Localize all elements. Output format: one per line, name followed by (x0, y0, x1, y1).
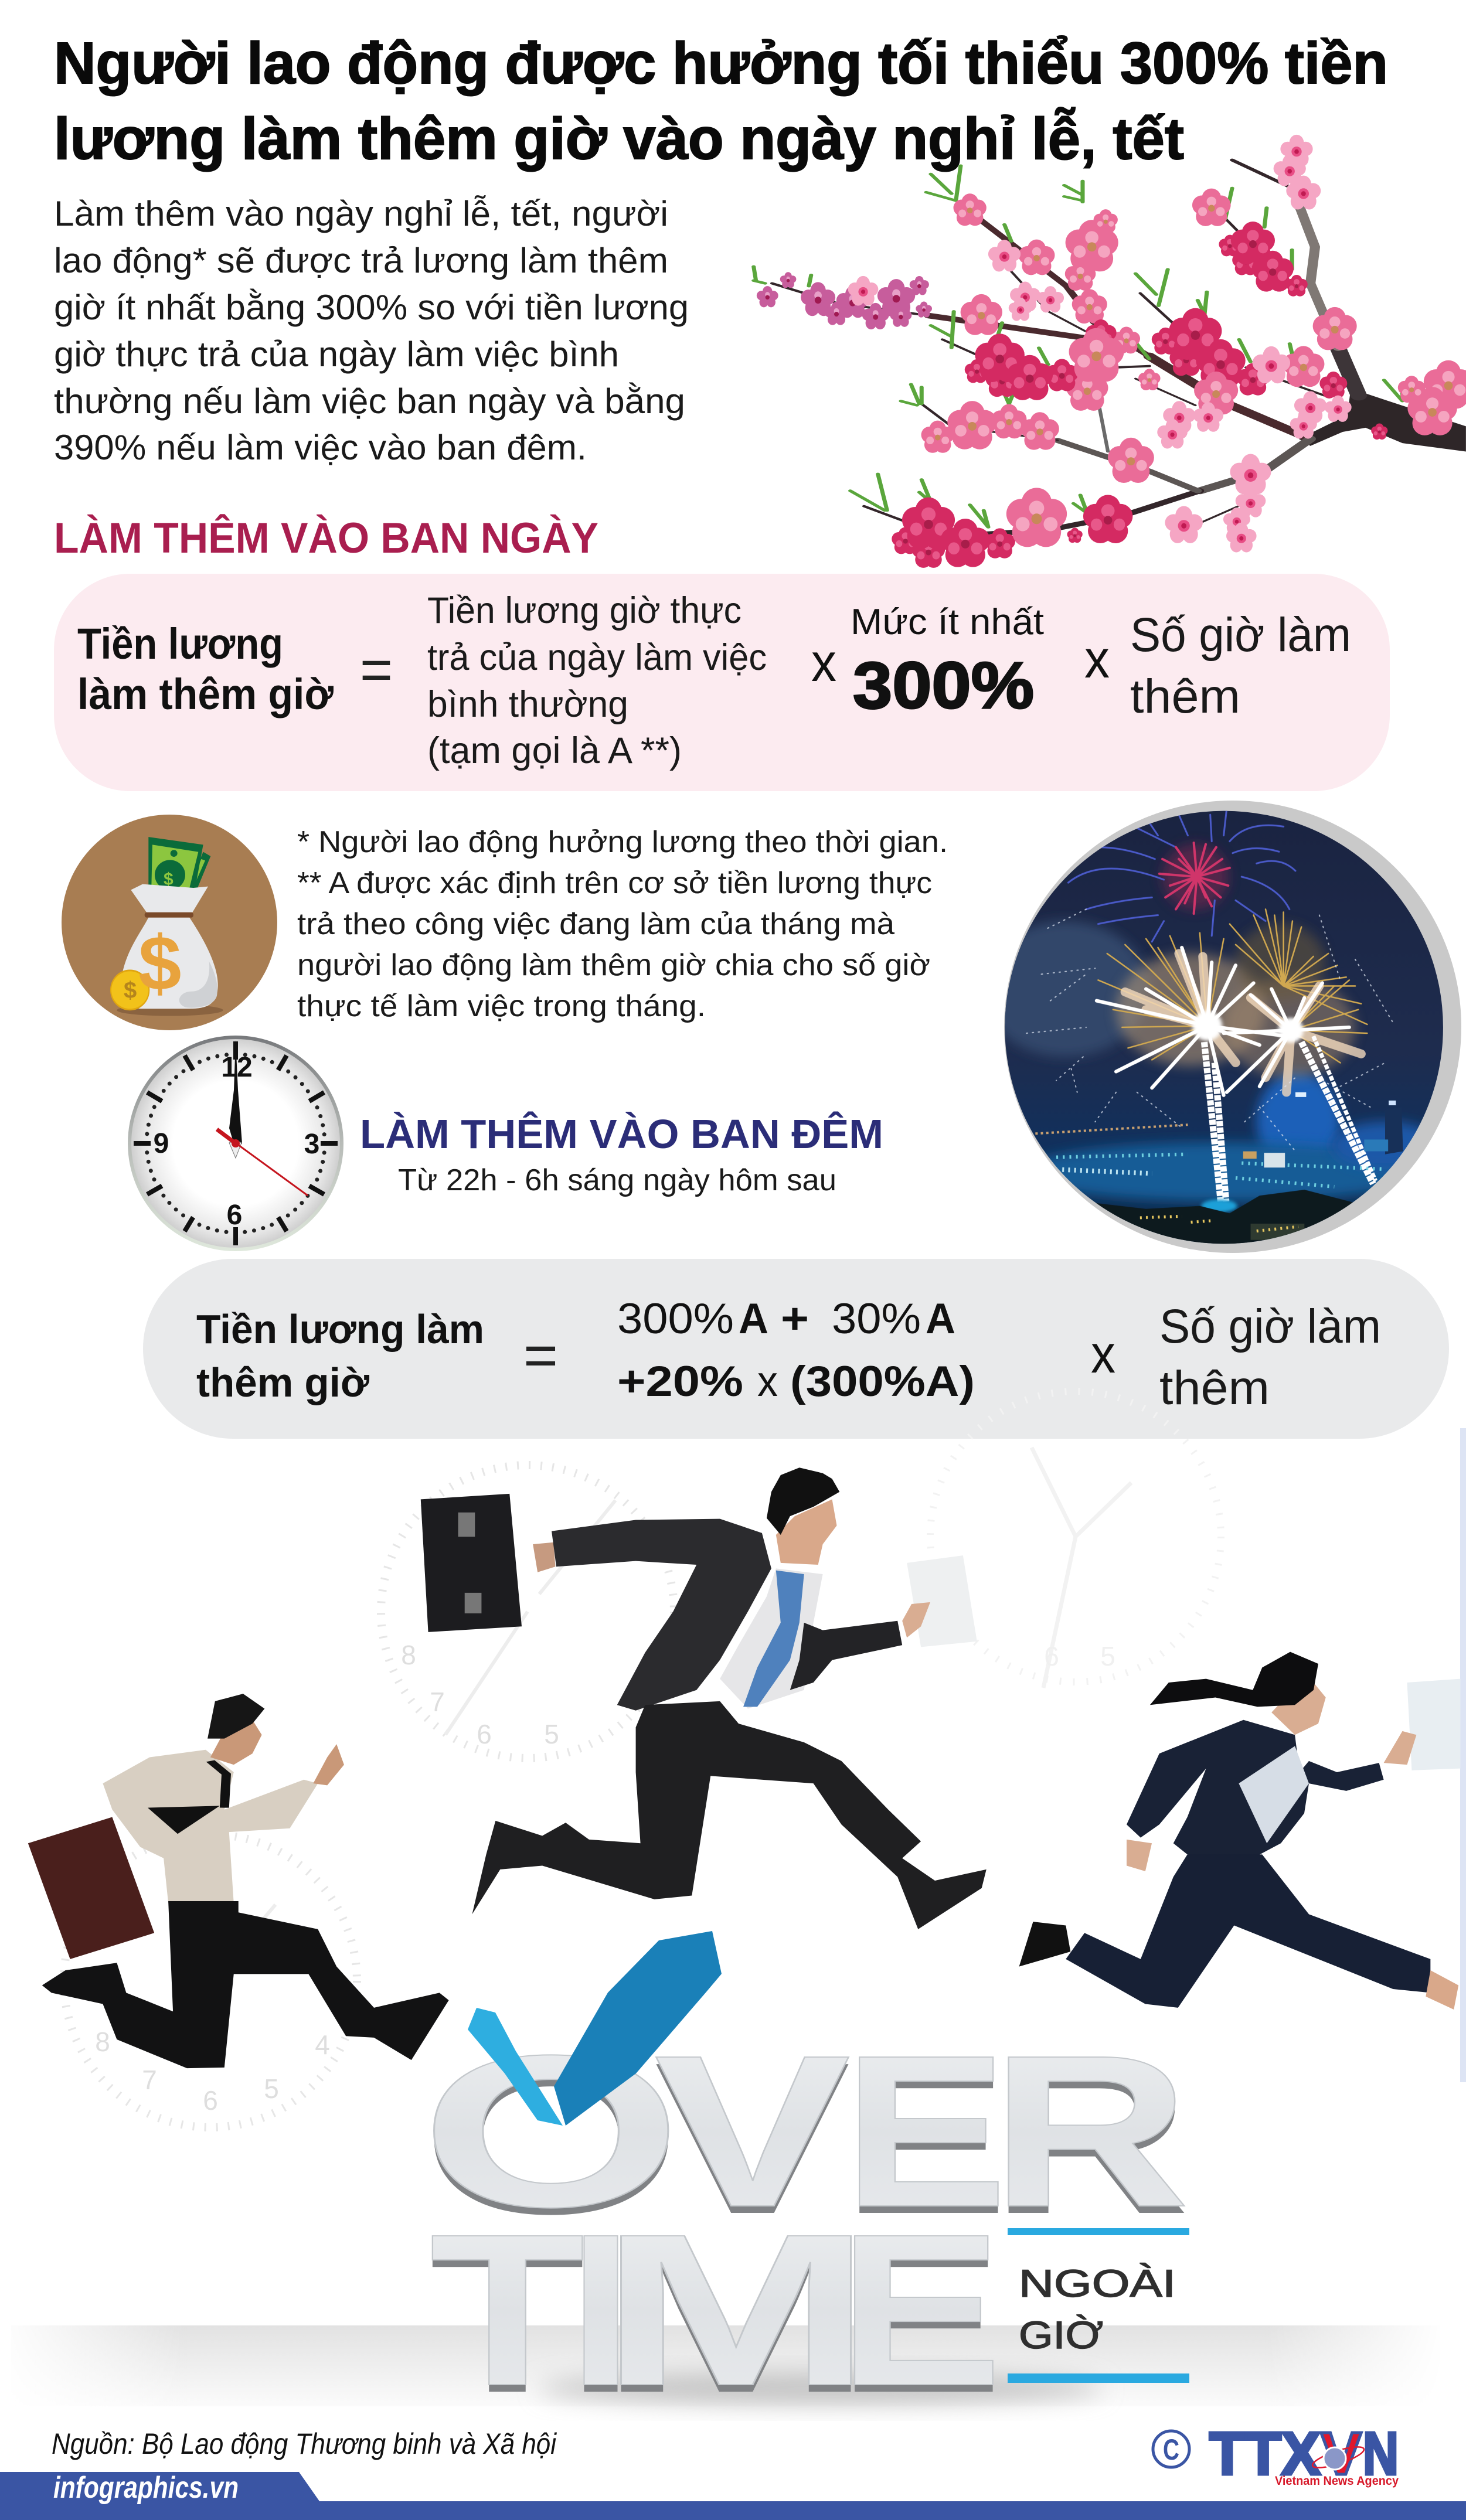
heading: daytime overtime: LÀM THÊM VÀO BAN NGÀY (54, 515, 598, 562)
intro text block: lao động* sẽ được trả lương làm thêm (54, 241, 668, 280)
copyright mark (1153, 2431, 1189, 2467)
base wage term (427, 590, 767, 771)
overtime logotype (420, 1931, 1190, 2438)
intro text block: thường nếu làm việc ban ngày và bằng (54, 382, 685, 421)
branches (772, 160, 1359, 534)
vietnamese caption: NGOÀI (1019, 2262, 1176, 2305)
icon: money bag: $ (124, 978, 137, 1003)
paper (907, 1555, 977, 1647)
word TIME: E (838, 2189, 1002, 2431)
hands (1127, 1840, 1152, 1871)
clock numerals (154, 1052, 319, 1231)
intro text block: 390% nếu làm việc vào ban đêm. (54, 428, 587, 467)
word OVER shadow: O (420, 2018, 682, 2259)
footnotes: ** A được xác định trên cơ sở tiền lương thực (297, 866, 932, 900)
image: peach blossom branch (754, 135, 1466, 568)
clock numerals: 3 (304, 1129, 319, 1160)
panel: daytime formula (54, 574, 1390, 791)
website: infographics.vn (53, 2471, 239, 2505)
heading: night overtime (360, 1111, 883, 1197)
agency letters: N (1363, 2420, 1399, 2487)
clock hands (217, 1040, 308, 1196)
word TIME shadow: E (838, 2197, 1002, 2438)
formula middle line 1: A (926, 1295, 955, 1343)
ghost clock numbers: 6 (1044, 1641, 1059, 1671)
shirt (103, 1750, 318, 1903)
formula middle line 2: x (757, 1358, 778, 1405)
gold burst (1098, 909, 1367, 1063)
word OVER shadow (420, 2018, 1190, 2259)
clock numerals: 6 (227, 1200, 242, 1231)
dark hills (1096, 1190, 1353, 1244)
word OVER: E (843, 2011, 1008, 2252)
soft glows (1116, 844, 1355, 1078)
check mark (468, 1931, 722, 2126)
briefcase (421, 1494, 522, 1632)
equals sign: = (523, 1323, 558, 1388)
raised hand (313, 1744, 344, 1785)
formula middle line 1: A (739, 1295, 768, 1343)
word TIME shadow: T (430, 2197, 585, 2438)
agency letters: TTX (1209, 2420, 1321, 2487)
footnotes: thực tế làm việc trong tháng. (297, 989, 706, 1023)
ghost clock numbers: 8 (95, 2027, 110, 2057)
copyright mark: C (1163, 2433, 1179, 2466)
face and hair (210, 1720, 262, 1765)
formula middle line 1 (617, 1295, 955, 1343)
multiply sign: x (1091, 1324, 1115, 1384)
formula middle line 1: 300% (617, 1295, 734, 1343)
trunk (1299, 382, 1466, 451)
footnotes: trả theo công việc đang làm của tháng mà (297, 907, 894, 941)
title: Người lao động được hưởng tối thiểu 300% tiền (54, 30, 1388, 96)
minimum percentage (851, 602, 1044, 722)
vietnamese caption: GIỜ (1019, 2313, 1103, 2356)
icon: clock (128, 1036, 343, 1251)
tie (743, 1571, 804, 1707)
base wage term: Tiền lương giờ thực (427, 590, 741, 631)
minimum percentage: 300% (853, 649, 1034, 722)
word OVER: R (990, 2011, 1190, 2252)
briefcase (28, 1817, 154, 1959)
multiply sign: x (1084, 629, 1110, 689)
word TIME (430, 2189, 1002, 2431)
trousers (1066, 1854, 1430, 2008)
word OVER (420, 2011, 1190, 2252)
face and hair (776, 1499, 837, 1565)
agency letters: V (1321, 2420, 1362, 2487)
intro text block: giờ thực trả của ngày làm việc bình (54, 335, 619, 374)
intro text block (54, 194, 689, 467)
base wage term: trả của ngày làm việc (427, 637, 767, 678)
intro text block: Làm thêm vào ngày nghỉ lễ, tết, người (54, 194, 668, 233)
hair (1150, 1652, 1318, 1707)
ghost clock numbers: 7 (142, 2065, 157, 2095)
multiply sign: x (811, 633, 836, 693)
ghost clock numbers: 6 (203, 2085, 218, 2116)
overtime hours term: thêm (1159, 1361, 1270, 1415)
blossoms (757, 135, 1466, 568)
intro text block: giờ ít nhất bằng 300% so với tiền lương (54, 288, 689, 327)
ghost clock numbers: 7 (430, 1687, 445, 1717)
hands (533, 1542, 555, 1572)
formula middle line 1: 30% (832, 1295, 921, 1343)
agency letters (1209, 2420, 1399, 2487)
word TIME shadow: M (599, 2197, 873, 2438)
trousers and shoes (42, 1901, 449, 2068)
overtime hours term: Số giờ làm (1130, 608, 1351, 662)
logo: TTXVN (1153, 2420, 1399, 2488)
formula middle line 1: + (781, 1295, 809, 1343)
overtime hours term: thêm (1130, 670, 1240, 723)
minimum percentage: Mức ít nhất (851, 602, 1044, 642)
word TIME: T (430, 2189, 585, 2431)
word OVER shadow: E (843, 2018, 1008, 2259)
red burst (1159, 843, 1230, 914)
footnotes: * Người lao động hưởng lương theo thời gian. (297, 825, 948, 859)
trousers and shoes (472, 1701, 987, 1929)
ghost clock numbers: 5 (1100, 1641, 1115, 1671)
overtime hours term (1159, 1300, 1381, 1415)
word OVER shadow: V (654, 2018, 852, 2259)
clock numerals: 12 (221, 1052, 253, 1083)
overtime hours term: Số giờ làm (1159, 1300, 1381, 1353)
word OVER shadow: R (990, 2018, 1190, 2259)
footer band (0, 2471, 1466, 2520)
overtime hours term (1130, 608, 1351, 723)
footnotes: người lao động làm thêm giờ chia cho số giờ (297, 948, 930, 982)
clock numerals: 9 (154, 1128, 169, 1159)
ghost clock numbers: 8 (401, 1640, 416, 1670)
formula left term: Tiền lương làm (196, 1306, 484, 1352)
title: lương làm thêm giờ vào ngày nghỉ lễ, tết (54, 106, 1184, 172)
heading: night overtime: LÀM THÊM VÀO BAN ĐÊM (360, 1111, 883, 1157)
word OVER: O (420, 2011, 682, 2252)
vietnamese caption (1019, 2262, 1176, 2356)
city lights (1035, 1125, 1188, 1133)
image: fireworks (981, 797, 1465, 1260)
globe (1311, 2443, 1366, 2472)
face (1271, 1683, 1326, 1735)
blue burst (1068, 809, 1295, 942)
photo: businesswoman (1019, 1652, 1460, 2010)
ghost clock numbers: 5 (544, 1719, 559, 1749)
formula middle line 2 (617, 1358, 975, 1405)
blouse (1239, 1746, 1309, 1843)
base wage term: (tạm gọi là A **) (427, 730, 682, 771)
jacket (552, 1519, 771, 1711)
ghost clock numbers: 6 (477, 1719, 492, 1749)
ghost clocks background (64, 1391, 1221, 2127)
icon: money bag: $ (138, 920, 181, 1006)
paper (1407, 1679, 1460, 1770)
formula middle line 2: +20% (617, 1358, 743, 1405)
formula left term: thêm giờ (196, 1360, 369, 1405)
title (54, 30, 1388, 172)
formula left term (77, 619, 334, 718)
equals sign: = (360, 637, 393, 703)
night hours note: Từ 22h - 6h sáng ngày hôm sau (398, 1163, 836, 1197)
shoes (1019, 1922, 1070, 1967)
accent bars (1008, 2228, 1189, 2383)
word TIME shadow (430, 2197, 1002, 2438)
formula left term: làm thêm giờ (77, 670, 334, 718)
sparks (1026, 909, 1394, 1152)
ghost clock numbers: 4 (315, 2029, 330, 2060)
ghost clock numbers: 5 (264, 2073, 279, 2104)
right edge strip (1460, 1428, 1466, 2082)
formula left term: Tiền lương (77, 619, 283, 668)
word TIME: I (569, 2189, 633, 2431)
icon: money bag (62, 815, 277, 1030)
white bursts (1125, 953, 1361, 1092)
agency name: Vietnam News Agency (1275, 2474, 1399, 2488)
leaves (754, 166, 1403, 527)
base wage term: bình thường (427, 684, 628, 725)
source line: Nguồn: Bộ Lao động Thương binh và Xã hội (52, 2427, 557, 2460)
formula middle line 2: (300%A) (790, 1358, 975, 1405)
word TIME: M (599, 2189, 873, 2431)
panel: night formula (143, 1259, 1449, 1439)
word OVER: V (654, 2011, 852, 2252)
photo: man with brown briefcase (28, 1694, 449, 2068)
icon: money bag: $ (164, 870, 174, 889)
shirt (720, 1568, 823, 1709)
word TIME shadow: I (569, 2197, 633, 2438)
jacket (1127, 1720, 1384, 1858)
ghost clock numbers (95, 1640, 1115, 2116)
waistcoat shape (148, 1806, 220, 1834)
footnotes (297, 825, 948, 1023)
photo: businessman with black briefcase (421, 1467, 987, 1929)
formula left term (196, 1306, 484, 1405)
floor band (11, 2325, 1440, 2406)
